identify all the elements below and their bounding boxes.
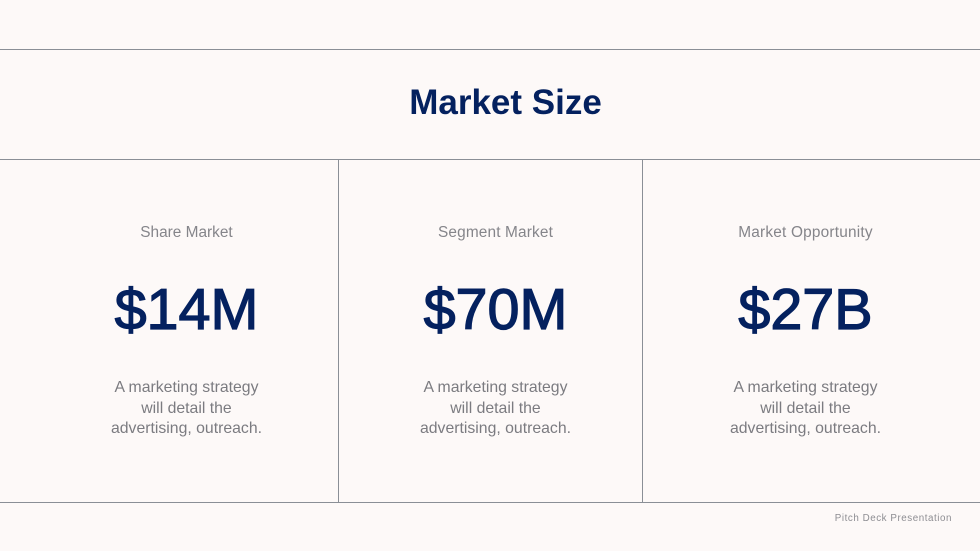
value: $27B: $27B [738,278,873,342]
description: segment market: will detail the [450,400,541,416]
description: segment market: A marketing strategy [424,379,568,396]
description: market opportunity: will detail the [760,400,851,416]
label: segment market: Segment Market [438,224,553,241]
description: share market: advertising, outreach. [111,420,262,437]
description: segment market: advertising, outreach. [420,420,571,437]
panel: market opportunity [730,224,881,437]
description: share market [111,379,262,437]
panel: segment market [420,224,571,437]
description: share market: A marketing strategy [114,379,258,396]
label: market opportunity: Market Opportunity [738,224,873,241]
value: $70M: $70M [424,278,567,342]
footer text: Pitch Deck Presentation [835,513,952,524]
description: share market: will detail the [141,400,232,416]
panel: share market [111,224,262,437]
description: market opportunity: A marketing strategy [734,379,878,396]
description: market opportunity: advertising, outreach. [730,420,881,437]
label: share market: Share Market [140,224,233,241]
value: $14M: $14M [115,278,258,342]
title: Market Size [409,83,602,122]
description: segment market [420,379,571,437]
description: market opportunity [730,379,881,437]
